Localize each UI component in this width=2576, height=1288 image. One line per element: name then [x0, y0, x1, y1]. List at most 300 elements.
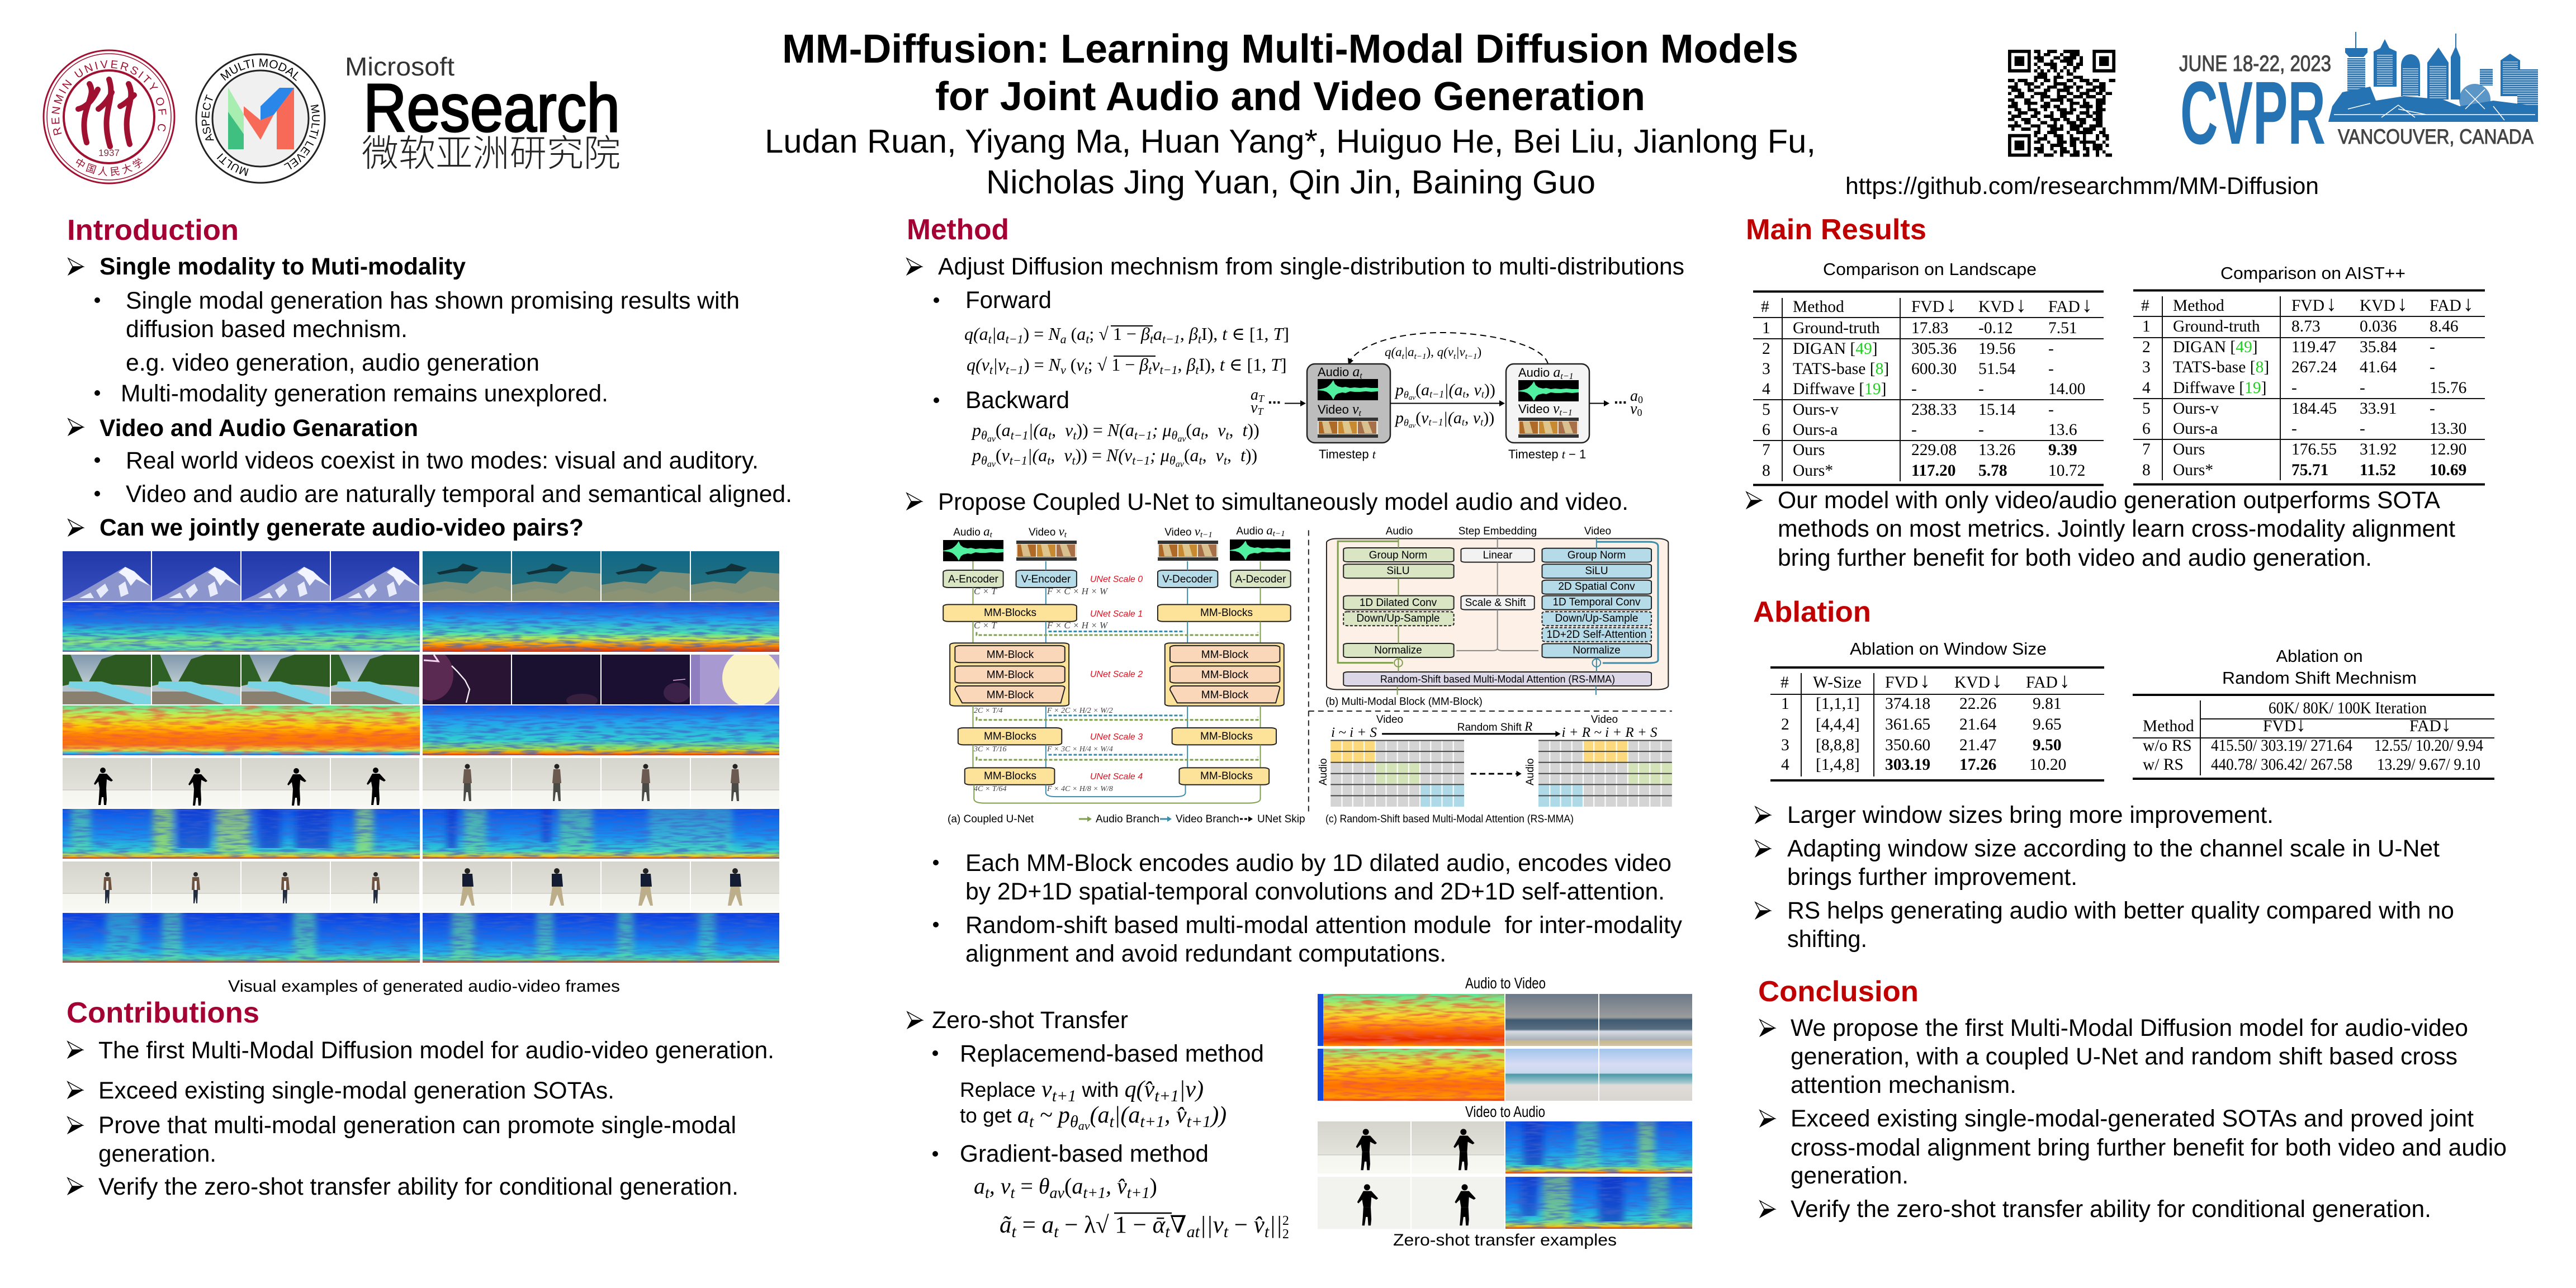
labels: mm-block: (b) Multi-Modal Block (MM-Block)	[1325, 696, 1483, 708]
table: ablation on random shift: Method	[2143, 717, 2194, 735]
table: comparison on aist++: -	[2291, 379, 2297, 397]
table title: random shift: Ablation on	[2276, 646, 2363, 666]
heading: conclusion: Conclusion	[1758, 976, 1919, 1008]
table: comparison on aist++: 12.90	[2430, 441, 2466, 458]
diagram: diffusion process	[1251, 333, 1643, 461]
text block: introduction bullets	[68, 253, 792, 541]
equations: backward: t	[1048, 428, 1052, 442]
panel: ablation	[1753, 596, 2494, 953]
logo: MM-Diffusion multi modal	[196, 54, 325, 183]
table: comparison on landscape: Ours-v	[1793, 401, 1839, 419]
audio to video images	[1318, 994, 1692, 1101]
table: comparison on aist++: -	[2360, 379, 2365, 397]
equations: forward: (a	[1071, 324, 1086, 344]
diagram: rs-mma grids: Random Shift R	[1457, 719, 1532, 733]
table title: aist++: Comparison on AIST++	[2220, 263, 2405, 283]
diagram: diffusion process: t	[1402, 352, 1405, 361]
text block: zero-shot transfer: ã	[1000, 1212, 1012, 1238]
equations: forward: a	[1060, 332, 1067, 346]
equations: backward: |(a	[1029, 420, 1048, 440]
labels: coupled u-net: F × 3C × H/4 × W/4	[1046, 745, 1113, 754]
table: ablation on window size: 2	[1781, 716, 1789, 733]
text block: zero-shot transfer: −	[1228, 1212, 1254, 1238]
diagram: diffusion process: av	[1409, 393, 1415, 401]
label: video to audio: Video to Audio	[1465, 1103, 1545, 1120]
diagram: diffusion process: (	[1415, 409, 1421, 427]
logo: CVPR 2023 Vancouver: CVPR	[2180, 63, 2326, 163]
text block: zero-shot transfer: θ	[1070, 1112, 1078, 1131]
text block: zero-shot transfer: ||	[1269, 1212, 1282, 1238]
equations: backward: v	[1216, 445, 1224, 465]
table: comparison on landscape: 9.39	[2048, 441, 2077, 459]
labels: coupled u-net: MM-Blocks	[984, 770, 1036, 782]
equations: backward: v	[1002, 445, 1010, 465]
labels: coupled u-net: MM-Block	[1201, 649, 1249, 661]
table: comparison on aist++: 19]	[2244, 379, 2266, 397]
table: comparison on aist++: -	[2430, 400, 2435, 418]
equations: forward: v	[1060, 363, 1066, 377]
table: comparison on aist++: 184.45	[2291, 400, 2337, 418]
labels: mm-block: Audio	[1386, 525, 1413, 537]
labels: coupled u-net: 3C × T/16	[973, 745, 1006, 754]
table: comparison on landscape: 600.30	[1911, 360, 1957, 378]
labels: coupled u-net: 2C × T/4	[974, 707, 1002, 715]
text block: zero-shot transfer: t+1	[1052, 1087, 1076, 1105]
labels: coupled u-net: t	[1064, 531, 1067, 539]
diagram: diffusion process: )	[1478, 345, 1481, 359]
labels: coupled u-net: MM-Block	[1201, 669, 1249, 681]
equations: forward: I),	[1199, 354, 1220, 375]
diagram: diffusion process: ))	[1484, 381, 1495, 399]
equations: forward: t−1	[1006, 363, 1024, 377]
text block: zero-shot transfer: Gradient-based method	[960, 1140, 1209, 1167]
equations: backward: av	[1176, 460, 1185, 469]
table: ablation on random shift: FVD↓	[2263, 713, 2306, 736]
spectrogram: row 2	[63, 705, 779, 755]
panel: main results	[1746, 214, 2485, 571]
diagram: diffusion process: t−1	[1560, 372, 1574, 381]
diagram: diffusion process: |(a	[1444, 381, 1463, 399]
labels: coupled u-net: (a) Coupled U-Net	[948, 813, 1034, 825]
logo: MM-Diffusion multi modal: MULTI LEVEL	[284, 105, 320, 169]
table: comparison on aist++: KVD↓	[2360, 292, 2408, 316]
table: comparison on landscape: 13.26	[1978, 441, 2015, 459]
panel: method top	[907, 214, 1684, 515]
diagram: diffusion process: Audio a	[1318, 363, 1360, 380]
labels: coupled u-net: MM-Block	[1201, 689, 1249, 701]
equations: forward: β	[1139, 354, 1148, 375]
equations: forward	[964, 324, 1289, 377]
spectrogram: row 4	[63, 913, 779, 963]
diagram: rs-mma grids: i + R ~ i + R + S	[1561, 725, 1658, 740]
equations: backward: N(a	[1107, 420, 1134, 440]
labels: mm-block: Normalize	[1573, 645, 1621, 656]
equations: forward: t	[989, 363, 993, 377]
table: comparison on landscape: 238.33	[1911, 401, 1957, 419]
text block: zero-shot transfer: θ	[1039, 1173, 1050, 1199]
title: MM-Diffusion: Learning Multi-Modal Diffusion Models	[782, 27, 1798, 72]
logo: Microsoft Research: Microsoft	[345, 52, 454, 81]
text block: ablation findings: Adapting window size according to the channel scale in U-Net	[1787, 835, 2440, 862]
labels: coupled u-net: UNet Scale 1	[1090, 609, 1143, 619]
table: ablation on window size: 361.65	[1885, 716, 1930, 733]
text block: mm-block explanation	[933, 850, 1683, 967]
text block: zero-shot transfer: , v̂	[1106, 1173, 1127, 1199]
labels: mm-block: Linear	[1483, 550, 1513, 561]
labels: mm-block: 1D+2D Self-Attention	[1546, 629, 1647, 641]
equations: backward: (	[1184, 445, 1190, 465]
equations: backward: t−1	[1011, 428, 1029, 442]
table: comparison on aist++: 8.46	[2430, 318, 2459, 335]
table: ablation on window size: 9.81	[2033, 695, 2062, 713]
table: comparison on landscape: TATS-base [	[1793, 360, 1876, 378]
table: ablation on random shift: w/ RS	[2143, 756, 2184, 774]
frames: ocean	[423, 551, 779, 601]
text block: zero-shot transfer: |v)	[1179, 1077, 1204, 1102]
text block: zero-shot transfer: t+1	[1187, 1112, 1211, 1131]
equations: forward: t	[1086, 332, 1090, 346]
url: https://github.com/researchmm/MM-Diffusion	[1845, 173, 2319, 200]
equations: forward: t	[988, 332, 992, 346]
table: comparison on aist++: 31.92	[2360, 441, 2397, 458]
text block: zero-shot transfer: t	[1029, 1112, 1034, 1131]
table: comparison on aist++: 11.52	[2360, 461, 2396, 479]
text block: results summary: methods on most metrics. Jointly learn cross-modality alignment	[1778, 515, 2455, 542]
text block: zero-shot transfer: to get a	[960, 1102, 1029, 1128]
text block: zero-shot transfer: with	[1076, 1078, 1125, 1101]
equations: backward: ,	[1050, 445, 1064, 465]
diagram: diffusion process: t−1	[1414, 352, 1426, 361]
table: comparison on aist++: TATS-base [	[2173, 358, 2256, 376]
text block: zero-shot transfer: =	[1015, 1173, 1039, 1199]
table: ablation on random shift: 60K/ 80K/ 100K Iteration	[2269, 699, 2427, 717]
table: comparison on landscape: 15.14	[1978, 401, 2016, 419]
text block: zero-shot transfer: av	[1078, 1119, 1090, 1133]
diagram: diffusion process: T	[1257, 406, 1264, 417]
table: comparison on aist++: 35.84	[2360, 338, 2397, 356]
logo: CVPR 2023 Vancouver: JUNE 18-22, 2023	[2179, 51, 2331, 76]
table: comparison on landscape: -	[1911, 421, 1917, 439]
equations: backward: av	[987, 460, 996, 469]
table: comparison on aist++	[2133, 291, 2485, 484]
labels: mm-block: 2D Spatial Conv	[1558, 581, 1635, 593]
heading: ablation: Ablation	[1753, 596, 1871, 628]
labels: mm-block: Down/Up-Sample	[1357, 613, 1439, 624]
table: comparison on aist++: 4	[2142, 379, 2151, 397]
text block: zero-shot transfer: 2	[1282, 1214, 1289, 1228]
equations: backward: t	[1047, 453, 1051, 467]
labels: coupled u-net: MM-Block	[987, 649, 1034, 661]
table: comparison on landscape: 51.54	[1978, 360, 2016, 378]
table: comparison on landscape: 305.36	[1911, 340, 1957, 358]
table: comparison on landscape: Ground-truth	[1793, 319, 1880, 337]
table: comparison on aist++: 15.76	[2430, 379, 2466, 397]
labels: coupled u-net: t−1	[1200, 531, 1213, 539]
table: ablation on window size: KVD↓	[1954, 669, 2002, 693]
diagram: diffusion process: p	[1395, 381, 1404, 399]
table: comparison on landscape: -0.12	[1978, 319, 2012, 337]
table: comparison on aist++: 49]	[2236, 338, 2258, 356]
text block: zero-shot transfer: |(a	[1114, 1102, 1140, 1128]
diagram: diffusion process: t	[1481, 389, 1485, 400]
frames: lightning	[409, 649, 780, 707]
icon: QR code	[2008, 51, 2115, 155]
labels: mm-block	[1325, 525, 1647, 708]
labels: coupled u-net: UNet Scale 0	[1090, 575, 1143, 584]
text block: conclusion list	[1760, 1015, 2507, 1223]
diagram: diffusion process: T	[1258, 393, 1265, 404]
equations: forward: |a	[992, 324, 1006, 344]
text block: mm-block explanation: by 2D+1D spatial-temporal convolutions and 2D+1D self-attention.	[965, 878, 1665, 905]
labels: coupled u-net: V-Encoder	[1021, 574, 1071, 585]
table: comparison on aist++: 119.47	[2291, 338, 2336, 356]
table: comparison on landscape: Ours*	[1793, 462, 1833, 480]
table: comparison on landscape: -	[1978, 421, 1984, 439]
table: comparison on aist++: DIGAN [	[2173, 338, 2236, 356]
equations: forward: t	[1148, 363, 1152, 377]
text block: introduction bullets: Real world videos coexist in two modes: visual and auditory.	[126, 447, 759, 474]
label: audio to video: Audio to Video	[1465, 974, 1546, 992]
table: comparison on landscape: 17.83	[1911, 319, 1948, 337]
equations: backward: N(v	[1106, 445, 1133, 465]
table: comparison on aist++: -	[2360, 420, 2365, 438]
frames: mountain	[63, 551, 419, 601]
table: ablation on window size: [1,4,8]	[1816, 756, 1860, 774]
labels: mm-block: Video	[1584, 525, 1611, 537]
table: ablation on window size: 9.65	[2033, 716, 2062, 733]
diagram: diffusion process: ...	[1268, 390, 1281, 407]
table: comparison on landscape: 7	[1762, 441, 1770, 459]
equations: backward: ; μ	[1150, 445, 1169, 465]
equations: forward: v	[1152, 354, 1160, 375]
equations: forward: |v	[993, 354, 1006, 375]
table: comparison on aist++: 8]	[2256, 358, 2269, 376]
text block: zero-shot transfer: t+1	[1140, 1112, 1164, 1131]
text block: conclusion list: cross-modal alignment bring further benefit for both video and audio	[1791, 1134, 2507, 1161]
logo: Renmin University of China: 中 国 人 民 大 学	[76, 158, 143, 177]
logo: Microsoft Research	[345, 52, 621, 177]
text block: contributions list: Verify the zero-shot transfer ability for conditional generation.	[98, 1173, 738, 1200]
diagram: diffusion process: a	[1251, 386, 1258, 404]
equations: forward: ; √ 1 −	[1088, 354, 1139, 375]
table: comparison on landscape: DIGAN [	[1793, 340, 1855, 358]
table: comparison on aist++: 8	[2142, 461, 2151, 479]
table: ablation on window size: #	[1781, 674, 1789, 692]
table: comparison on aist++: 41.64	[2360, 358, 2397, 376]
equations: backward: (	[996, 420, 1002, 440]
text block: introduction bullets: Multi-modality generation remains unexplored.	[121, 380, 608, 407]
diagram: diffusion process: av	[1409, 421, 1415, 429]
text block: introduction bullets: Single modal generation has shown promising results with	[126, 287, 740, 314]
table: comparison on aist++: -	[2291, 420, 2297, 438]
text block: mm-block explanation: alignment and avoid redundant computations.	[965, 940, 1446, 967]
text block: introduction bullets: Video and audio are naturally temporal and semantical aligned.	[126, 481, 792, 508]
equations: backward: t	[1201, 428, 1205, 442]
equations: backward: (	[1186, 420, 1192, 440]
table: comparison on landscape: FAD↓	[2048, 293, 2092, 317]
frames: dancer black jacket	[63, 758, 419, 808]
labels: coupled u-net: UNet Scale 2	[1090, 670, 1143, 679]
text block: zero-shot transfer: a	[1042, 1212, 1054, 1238]
text block: results summary	[1746, 487, 2455, 571]
equations: backward: t	[1199, 453, 1202, 467]
table: ablation on window size: 21.47	[1959, 736, 1996, 754]
diagram: diffusion process: t	[1360, 371, 1362, 381]
table: comparison on aist++: 0.036	[2360, 318, 2397, 335]
labels: coupled u-net: F × C × H × W	[1046, 586, 1109, 596]
heading: introduction: Introduction	[67, 214, 239, 247]
labels: coupled u-net: Video v	[1164, 524, 1200, 538]
equations: forward: t ∈ [1, T]	[1222, 324, 1289, 344]
equations: forward: q(v	[967, 354, 989, 375]
text block: zero-shot transfer: ᾱ	[1153, 1212, 1166, 1238]
table: ablation on window size: 4	[1781, 756, 1789, 774]
labels: coupled u-net: UNet Scale 4	[1090, 772, 1143, 782]
text block: ablation findings: Larger window sizes bring more improvement.	[1787, 802, 2274, 828]
equations: backward: t))	[1240, 445, 1257, 465]
text block: adjust diffusion: Backward	[965, 387, 1069, 414]
frames: dancer patterned suit	[423, 758, 779, 808]
panel: visual examples figure	[63, 551, 780, 996]
labels: mm-block: 1D Temporal Conv	[1552, 596, 1641, 608]
table: ablation on window size: [1,1,1]	[1816, 695, 1860, 713]
labels: coupled u-net: Video v	[1029, 524, 1064, 538]
text block: zero-shot transfer: t	[1109, 1112, 1114, 1131]
logo: CVPR 2023 Vancouver	[2179, 32, 2538, 163]
labels: coupled u-net: Audio a	[1236, 523, 1273, 537]
table: comparison on aist++: 5	[2142, 400, 2151, 418]
text block: zero-shot transfer: , v̂	[1164, 1102, 1187, 1128]
text block: zero-shot transfer: ~ p	[1034, 1102, 1070, 1128]
text block: zero-shot transfer: =	[1016, 1212, 1042, 1238]
table: ablation on random shift: 440.78/ 306.42/ 267.58	[2211, 756, 2352, 774]
equations: backward: t−1	[1010, 453, 1027, 467]
diagram: diffusion process: t−1	[1465, 352, 1478, 361]
equations: backward: t	[1225, 428, 1229, 442]
text block: zero-shot transfer: at	[1187, 1223, 1200, 1241]
panel: contributions	[67, 997, 774, 1200]
table: ablation on random shift: 12.55/ 10.20/ 9.94	[2374, 737, 2483, 755]
table title: random shift: Random Shift Mechnism	[2222, 668, 2417, 688]
table: ablation on window size: 21.64	[1959, 716, 1997, 733]
text block: ablation findings: brings further improvement.	[1787, 864, 2077, 891]
text block: zero-shot transfer: v̂	[1254, 1212, 1265, 1238]
table: ablation on window size: 350.60	[1885, 736, 1930, 754]
diagram: diffusion process: |a	[1404, 345, 1414, 359]
table: ablation on window size: 17.26	[1959, 756, 1996, 774]
table: comparison on aist++: -	[2430, 338, 2435, 356]
text block: ablation findings: RS helps generating audio with better quality compared with no	[1787, 897, 2454, 924]
text block: propose coupled u-net: Propose Coupled U-Net to simultaneously model audio and video.	[938, 489, 1628, 515]
equations: forward: β	[1186, 354, 1195, 375]
text block: zero-shot transfer: t	[1224, 1223, 1229, 1241]
diagram: rs-mma grids: (c) Random-Shift based Multi-Modal Attention (RS-MMA)	[1325, 813, 1574, 825]
text block: ablation findings: shifting.	[1787, 926, 1867, 953]
text block: zero-shot transfer: a	[1072, 1173, 1083, 1199]
table: comparison on landscape: 117.20	[1911, 462, 1955, 480]
text block: zero-shot transfer: ∇	[1170, 1212, 1187, 1238]
table: comparison on landscape: 1	[1762, 319, 1770, 337]
table title: landscape: Comparison on Landscape	[1823, 259, 2037, 279]
equations: forward: t	[1085, 363, 1088, 377]
table: ablation on window size: 303.19	[1885, 756, 1930, 774]
table: comparison on landscape: 229.08	[1911, 441, 1957, 459]
table: comparison on landscape: Ours-a	[1793, 421, 1838, 439]
table: comparison on landscape: 7.51	[2048, 319, 2077, 337]
diagram: diffusion process: t−1	[1429, 389, 1444, 400]
text block: zero-shot transfer	[907, 1007, 1289, 1242]
table: ablation on window size: 1	[1781, 695, 1789, 713]
diagram: diffusion process: t	[1453, 352, 1456, 361]
diagram: diffusion process: Video v	[1518, 400, 1560, 416]
table: comparison on landscape: -	[1911, 380, 1917, 398]
table: comparison on aist++: Method	[2173, 297, 2224, 315]
table: comparison on landscape	[1753, 292, 2104, 485]
table: comparison on landscape: -	[2048, 340, 2054, 358]
labels: mm-block: SiLU	[1386, 565, 1410, 577]
table: comparison on landscape: -	[2048, 360, 2054, 378]
equations: backward: t−1	[1132, 453, 1150, 467]
labels: coupled u-net: t	[990, 531, 993, 539]
table: comparison on landscape: #	[1761, 298, 1769, 316]
diagram: diffusion process: t−1	[1428, 416, 1443, 428]
diagram: diffusion process: (	[1415, 381, 1421, 399]
equations: forward: q(a	[964, 324, 988, 344]
table: comparison on aist++: 267.24	[2291, 358, 2337, 376]
labels: coupled u-net: MM-Blocks	[1200, 607, 1253, 619]
diagram: diffusion process: v	[1630, 400, 1637, 418]
heading: contributions: Contributions	[67, 997, 259, 1029]
text block: results summary: Our model with only video/audio generation outperforms SOTA	[1778, 487, 2441, 514]
labels: coupled u-net: C × T	[974, 620, 997, 631]
table: comparison on landscape: 10.72	[2048, 462, 2085, 480]
frames: dancer brown jacket	[63, 861, 419, 911]
panel: zero-shot transfer examples	[1318, 974, 1692, 1249]
table: comparison on aist++: FAD↓	[2430, 292, 2474, 316]
table: comparison on landscape: 5.78	[1978, 462, 2007, 480]
equations: backward: |(a	[1027, 445, 1047, 465]
text block: introduction bullets: Video and Audio Genaration	[100, 415, 418, 442]
text block: adjust diffusion: Adjust Diffusion mechnism from single-distribution to multi-distributions	[938, 253, 1684, 280]
table: comparison on aist++: 7	[2142, 441, 2151, 458]
diagram: rs-mma grids: Audio	[1524, 758, 1536, 785]
labels: coupled u-net: MM-Blocks	[984, 607, 1036, 619]
text block: zero-shot transfer: t+1	[1154, 1087, 1179, 1105]
table: ablation on window size: FVD↓	[1885, 669, 1930, 693]
text block: conclusion list: generation.	[1791, 1162, 1909, 1189]
authors	[765, 123, 1816, 201]
title: for Joint Audio and Video Generation	[935, 74, 1645, 119]
diagram: diffusion process: ...	[1614, 390, 1627, 407]
authors: Ludan Ruan, Yiyang Ma, Huan Yang*, Huiguo He, Bei Liu, Jianlong Fu,	[765, 123, 1816, 160]
equations: backward: t−1	[1134, 428, 1152, 442]
table: comparison on landscape: 14.00	[2048, 380, 2085, 398]
labels: coupled u-net: 4C × T/64	[974, 785, 1006, 793]
labels: coupled u-net: MM-Block	[987, 689, 1034, 701]
table: comparison on landscape: 2	[1762, 340, 1770, 358]
text block: conclusion list: We propose the first Multi-Modal Diffusion model for audio-video	[1791, 1015, 2468, 1041]
table: comparison on aist++: 176.55	[2291, 441, 2337, 458]
text block: contributions list: Prove that multi-modal generation can promote single-modal	[98, 1112, 736, 1139]
diagram: coupled u-net and mm-block	[943, 523, 1672, 825]
table: ablation on window size: [8,8,8]	[1816, 736, 1860, 754]
equations: backward: a	[1190, 445, 1199, 465]
labels: coupled u-net: MM-Blocks	[1200, 731, 1253, 742]
text block: ablation findings	[1755, 802, 2454, 953]
equations: forward: ; √ 1 −	[1089, 324, 1141, 344]
table: comparison on landscape: 8	[1762, 462, 1770, 480]
equations: backward: t	[1224, 453, 1228, 467]
